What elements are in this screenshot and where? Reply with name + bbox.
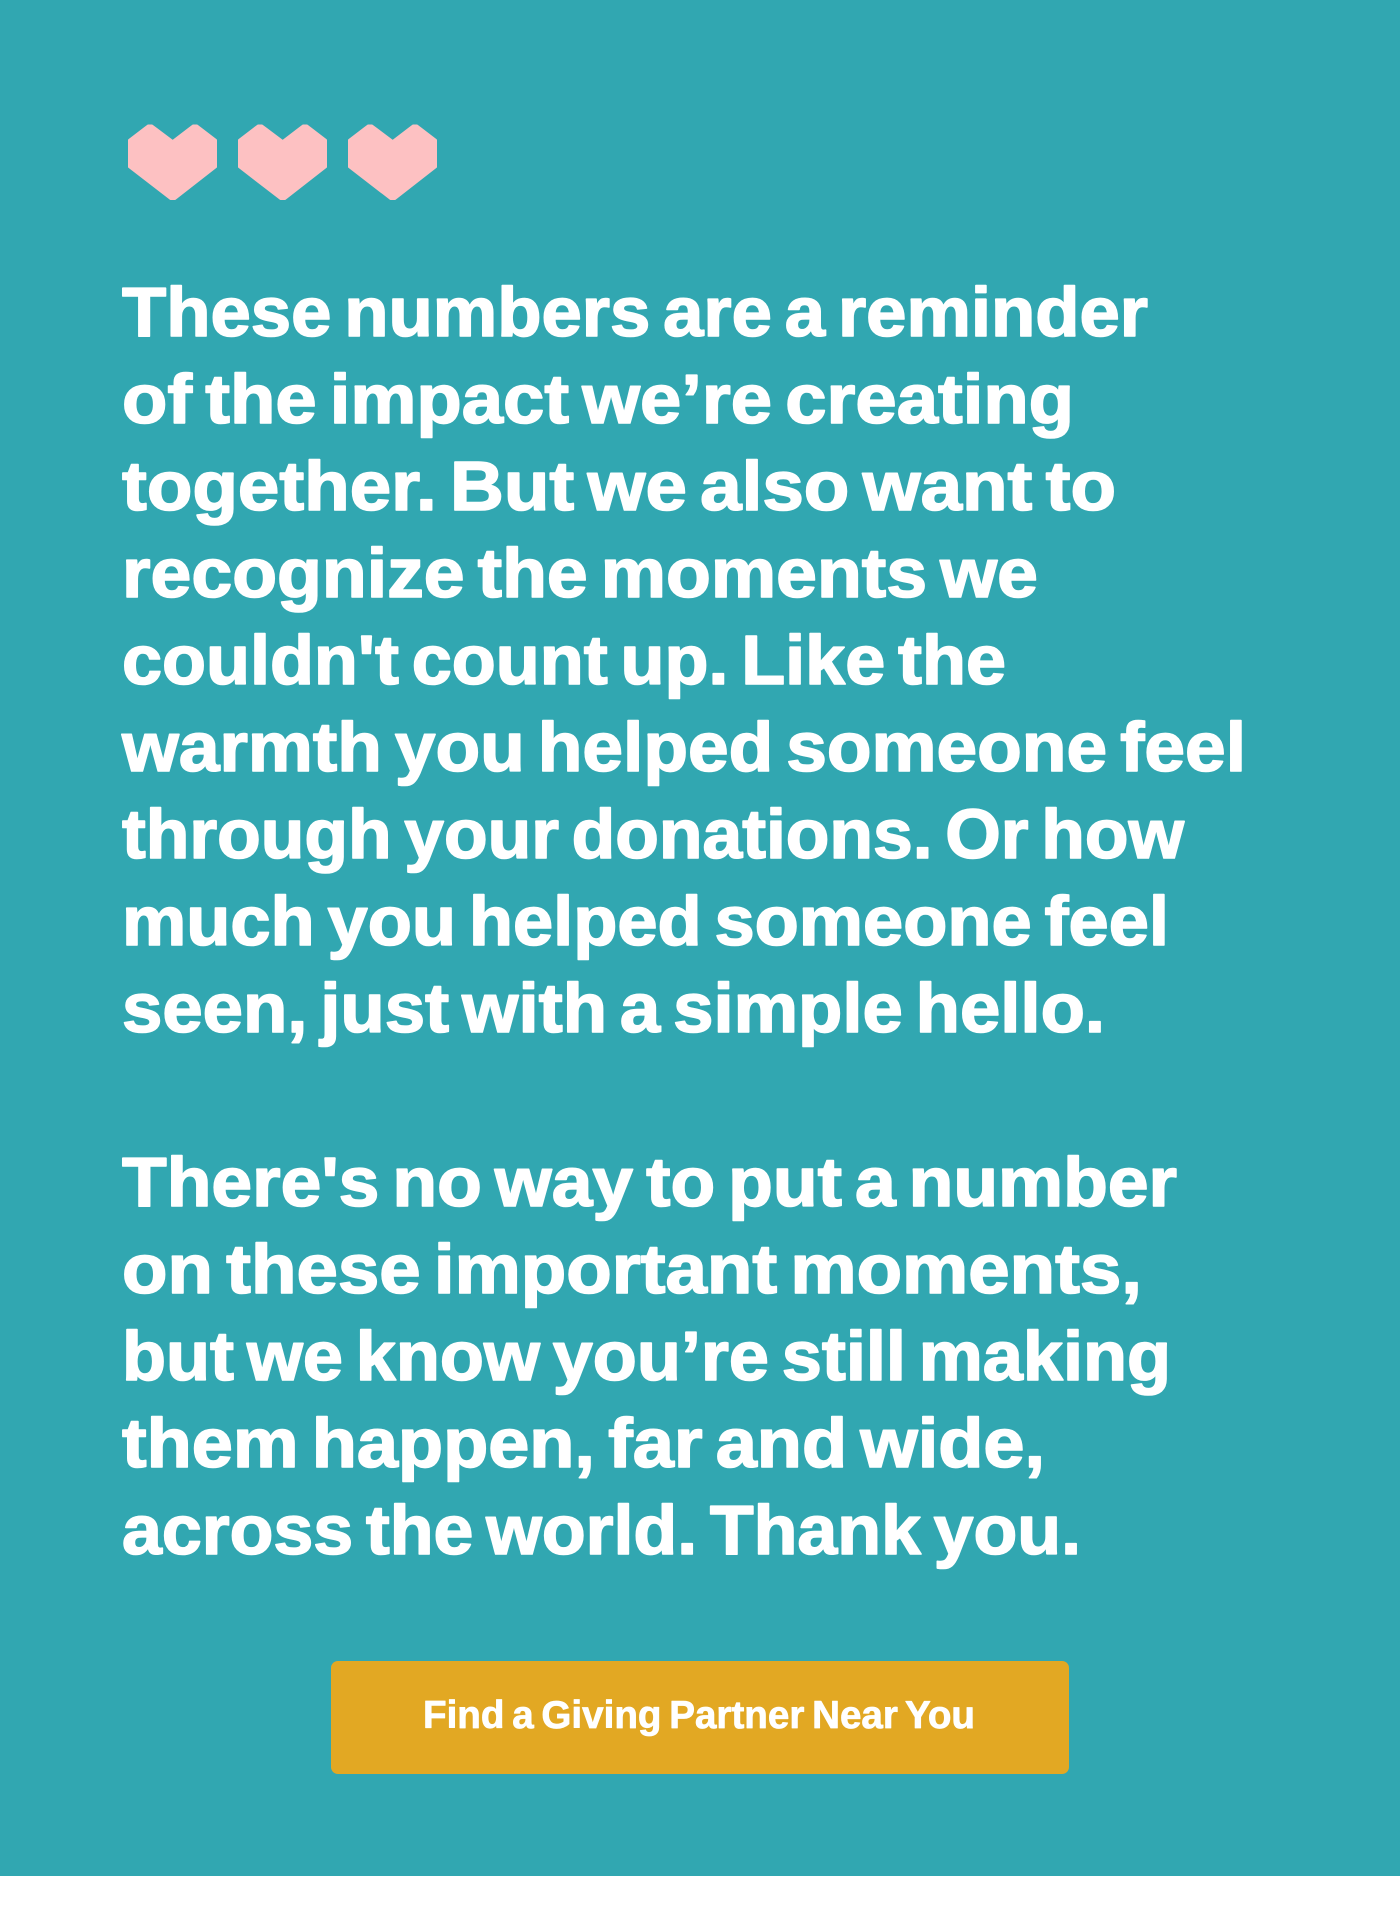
text block: first paragraph xyxy=(121,273,1246,1047)
text block: first paragraph: much you helped someone feel xyxy=(122,882,1169,960)
text block: first paragraph: seen, just with a simple hello. xyxy=(122,969,1105,1047)
text block: second paragraph: them happen, far and wide, xyxy=(122,1404,1045,1482)
text block: first paragraph: recognize the moments we xyxy=(122,534,1038,612)
text block: second paragraph: but we know you’re still making xyxy=(122,1317,1171,1395)
icon: three pink hearts xyxy=(129,126,436,199)
text block: first paragraph: These numbers are a reminder xyxy=(122,273,1148,351)
text block: first paragraph: together. But we also want to xyxy=(122,447,1116,525)
text block: second paragraph: There's no way to put a number xyxy=(122,1143,1177,1221)
text block: first paragraph: through your donations. Or how xyxy=(122,795,1185,873)
text block: first paragraph: warmth you helped someone feel xyxy=(121,708,1246,786)
text block: second paragraph xyxy=(122,1143,1177,1569)
text block: first paragraph: couldn't count up. Like the xyxy=(122,621,1006,699)
icon: heart 3 xyxy=(349,126,436,199)
text block: second paragraph: across the world. Thank you. xyxy=(122,1491,1081,1569)
button: find a giving partner xyxy=(331,1661,1069,1774)
icon: heart 1 xyxy=(129,126,216,199)
button: find a giving partner: Find a Giving Partner Near You xyxy=(423,1694,975,1737)
icon: heart 2 xyxy=(239,126,326,199)
text block: second paragraph: on these important moments, xyxy=(122,1230,1142,1308)
text block: first paragraph: of the impact we’re creating xyxy=(122,360,1074,438)
